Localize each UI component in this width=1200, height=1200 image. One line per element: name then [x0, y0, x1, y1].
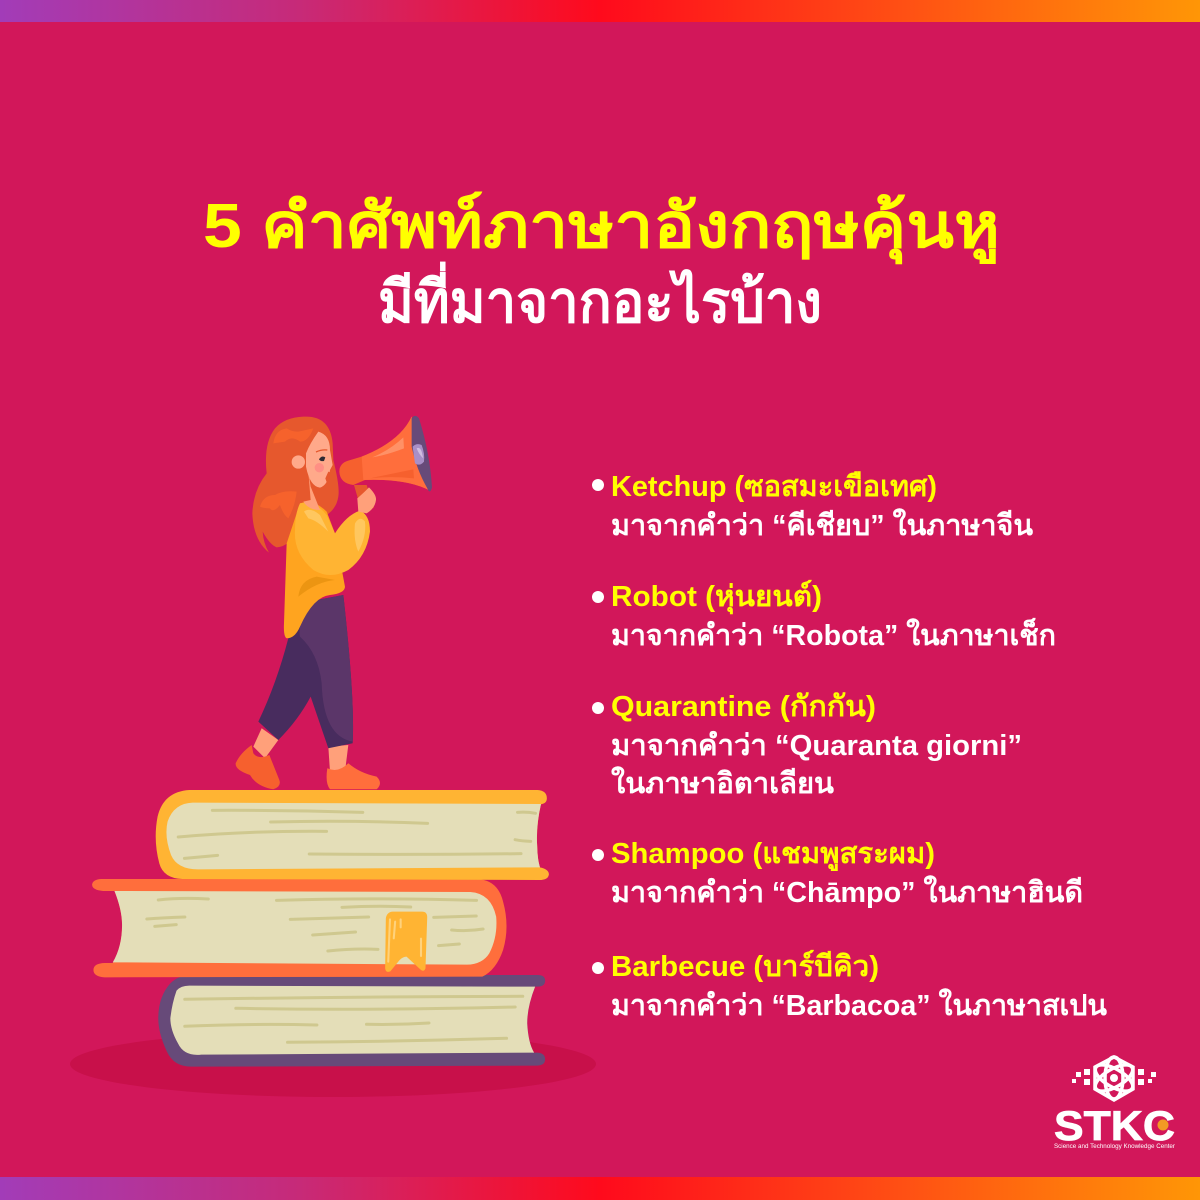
item: Robot	[592, 579, 1056, 652]
logo tagline: Science and Technology Knowledge Center	[1054, 1144, 1175, 1150]
item: Robot: Robot (หุ่นยนต์)	[611, 579, 822, 614]
leg front	[328, 745, 348, 772]
leg back	[253, 728, 278, 758]
title	[203, 191, 1000, 335]
bottom gradient bar	[0, 1177, 1200, 1200]
title: มีที่มาจากอะไรบ้าง	[378, 261, 822, 335]
shoe back	[236, 745, 280, 789]
title: 5 คำศัพท์ภาษาอังกฤษคุ้นหู	[203, 191, 1000, 264]
item: Barbecue: Barbecue (บาร์บีคิว)	[611, 949, 879, 983]
book: top yellow	[156, 790, 549, 880]
book: middle orange	[92, 879, 507, 977]
megaphone	[339, 416, 432, 513]
logo: STKC	[1054, 1057, 1175, 1150]
item: Quarantine: ในภาษาอิตาเลียน	[611, 766, 834, 800]
shoe front	[327, 763, 380, 789]
item: Ketchup: มาจากคำว่า “คีเชียบ” ในภาษาจีน	[611, 508, 1033, 542]
item: Ketchup	[592, 471, 1033, 542]
sweater	[284, 502, 345, 638]
hair back	[252, 417, 339, 553]
bullet list	[592, 471, 1107, 1022]
item: Shampoo: Shampoo (แชมพูสระผม)	[611, 838, 935, 871]
face and neck	[303, 472, 320, 510]
item: Barbecue: มาจากคำว่า “Barbacoa” ในภาษาสเปน	[611, 988, 1107, 1022]
icon: atom	[1091, 1057, 1137, 1100]
ground shadow	[70, 1031, 596, 1097]
illustration: girl with megaphone	[236, 416, 432, 789]
item: Robot: มาจากคำว่า “Robota” ในภาษาเช็ก	[611, 617, 1056, 652]
item: Shampoo: มาจากคำว่า “Chāmpo” ในภาษาฮินดี	[611, 875, 1083, 909]
hand	[357, 487, 376, 513]
item: Quarantine: Quarantine (กักกัน)	[611, 691, 876, 723]
logo wordmark: STKC	[1054, 1102, 1175, 1149]
trousers	[258, 595, 353, 748]
top gradient bar	[0, 0, 1200, 22]
item: Ketchup: Ketchup (ซอสมะเขือเทศ)	[611, 471, 937, 503]
item: Barbecue	[592, 949, 1107, 1022]
item: Quarantine	[592, 691, 1022, 800]
item: Shampoo	[592, 838, 1083, 909]
illustration: stack of books	[92, 790, 549, 1067]
book: bottom purple	[158, 975, 545, 1067]
item: Quarantine: มาจากคำว่า “Quaranta giorni”	[611, 730, 1022, 762]
sleeve	[295, 503, 370, 575]
bookmark	[385, 912, 427, 972]
